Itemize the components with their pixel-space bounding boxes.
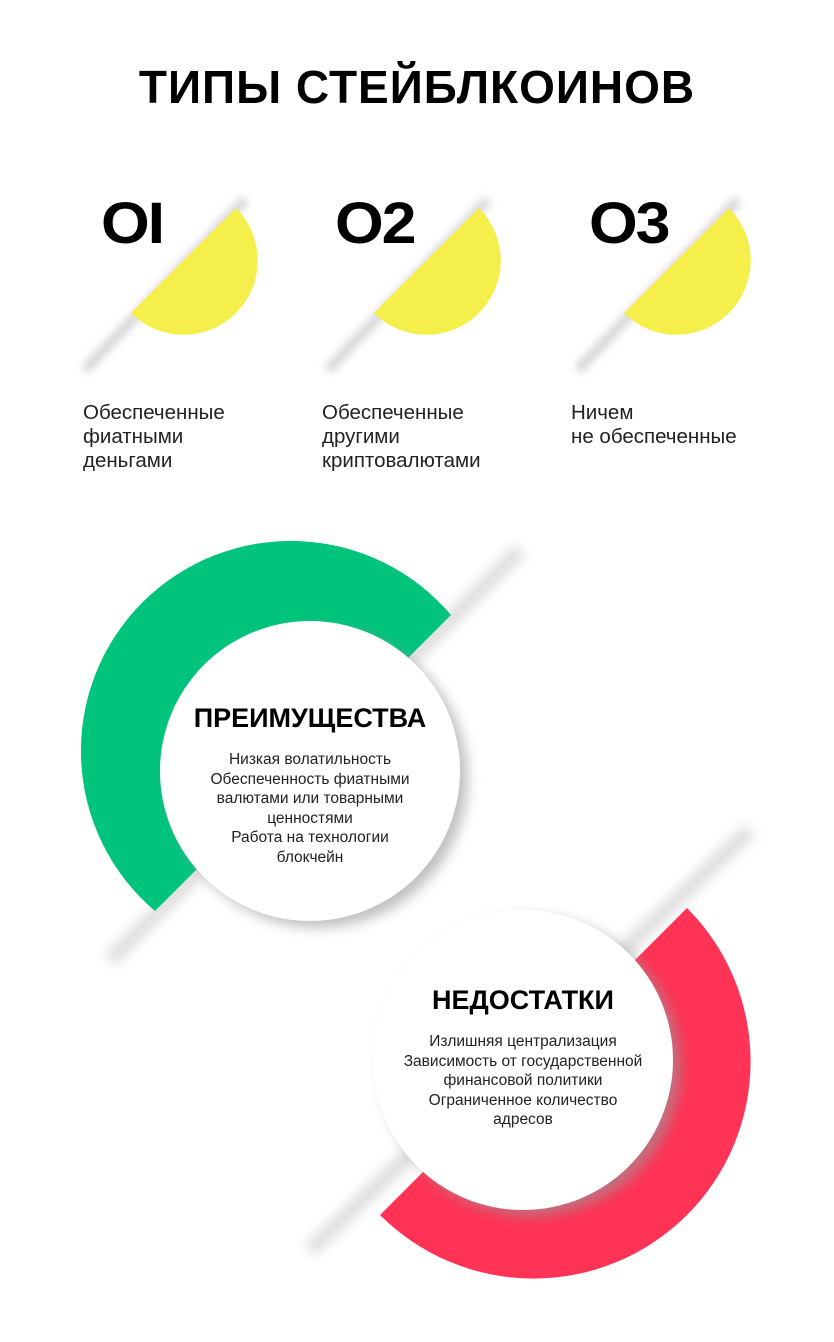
text: type 3: не обеспеченные: [571, 425, 737, 448]
advantages text: валютами или товарными: [217, 790, 403, 807]
text: type 3: Ничем: [571, 401, 633, 424]
number 03: O3: [589, 191, 668, 256]
disadvantages text: финансовой политики: [444, 1072, 602, 1089]
text: type 1: фиатными: [83, 425, 183, 448]
advantages text: ПРЕИМУЩЕСТВА: [194, 703, 426, 733]
text: type 2: Обеспеченные: [322, 401, 464, 424]
disadvantages text: НЕДОСТАТКИ: [432, 985, 614, 1015]
red ring: [310, 830, 751, 1279]
text: type 3: [571, 401, 737, 448]
text: type 1: [83, 401, 225, 472]
number 01: OI: [101, 191, 163, 256]
title: ТИПЫ СТЕЙБЛКОИНОВ: [139, 61, 695, 113]
icon: yellow half circle 03: [578, 200, 751, 370]
disadvantages text: Излишняя централизация: [429, 1033, 617, 1050]
text: type 2: криптовалютами: [322, 449, 481, 472]
advantages text: [194, 703, 426, 866]
disadvantages text: [404, 985, 642, 1128]
disadvantages text: Ограниченное количество: [429, 1092, 617, 1108]
advantages text: блокчейн: [277, 848, 343, 866]
text: type 2: [322, 401, 481, 472]
icon: yellow half circle 01: [85, 200, 258, 370]
advantages text: Обеспеченность фиатными: [210, 770, 410, 788]
advantages text: Низкая волатильность: [229, 751, 391, 768]
disadvantages text: адресов: [493, 1111, 553, 1128]
number 02: O2: [335, 191, 414, 256]
text: type 2: другими: [322, 425, 400, 448]
icon: yellow half circle 02: [328, 200, 501, 370]
disadvantages text: Зависимость от государственной: [404, 1052, 642, 1070]
advantages text: ценностями: [267, 810, 353, 826]
green ring: [81, 541, 520, 960]
advantages text: Работа на технологии: [231, 829, 389, 846]
text: type 1: Обеспеченные: [83, 401, 225, 424]
text: type 1: деньгами: [83, 449, 172, 472]
